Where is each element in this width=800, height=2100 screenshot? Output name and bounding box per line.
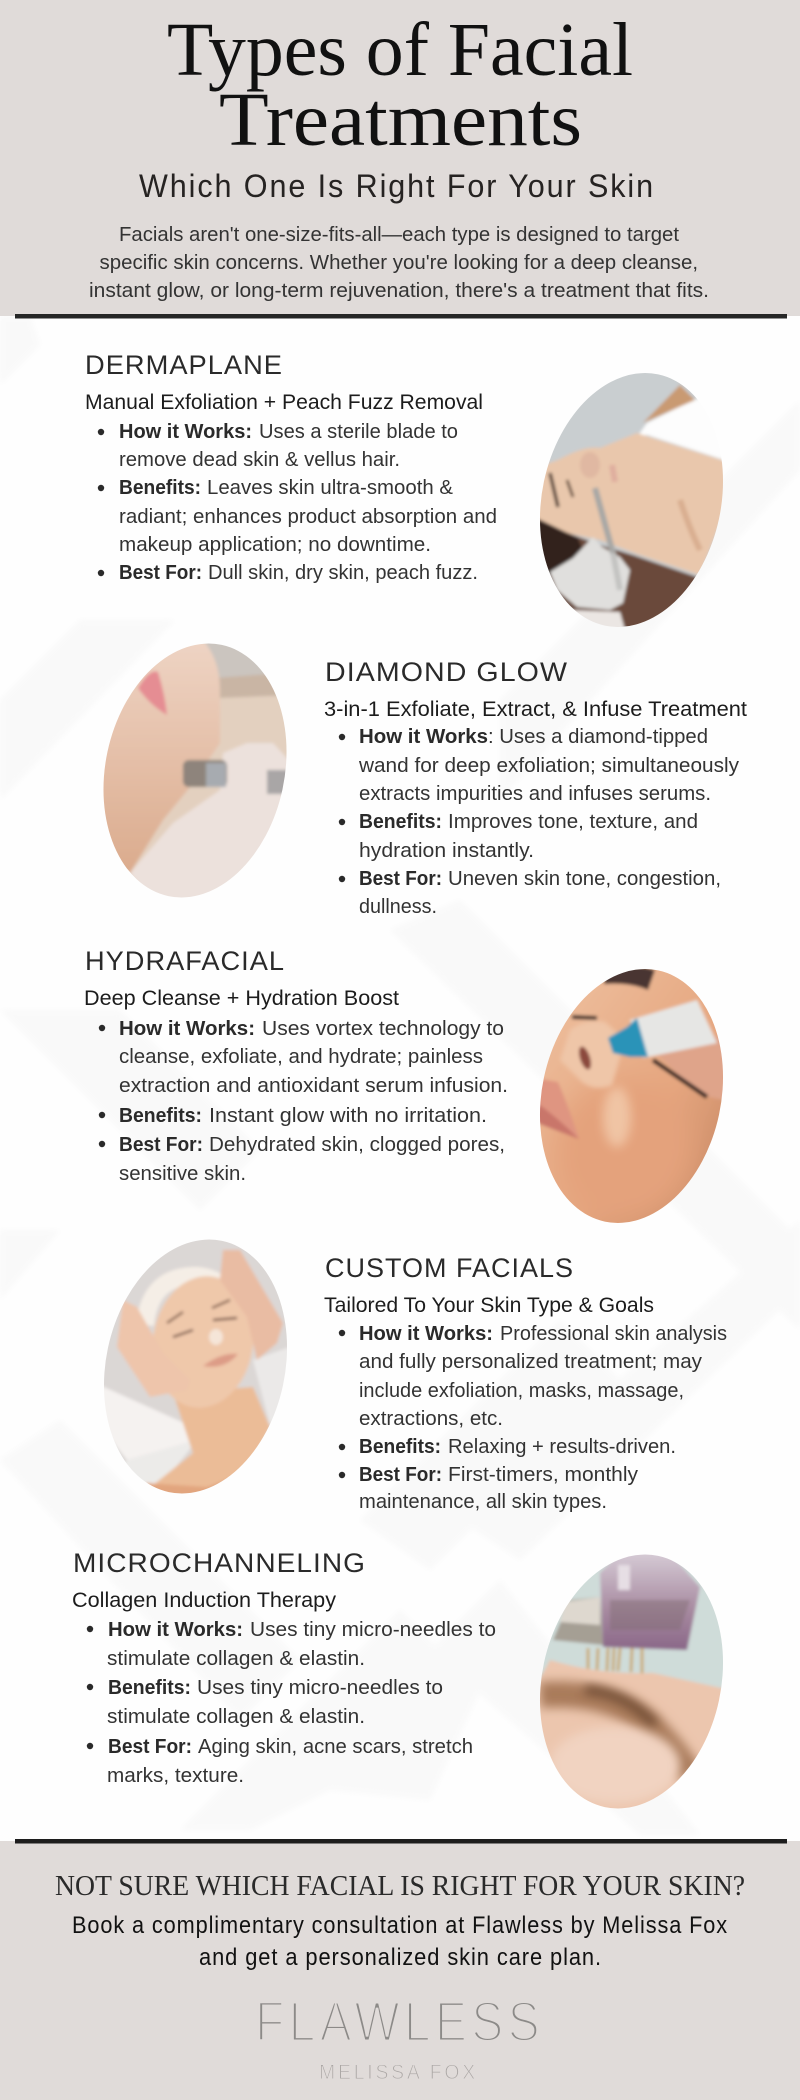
bullet list: diamond glow: Best For: — [359, 868, 442, 890]
bullet list: diamond glow: wand for deep exfoliation; simultaneously — [358, 755, 739, 777]
bullet list: custom facials: include exfoliation, masks, massage, — [359, 1380, 684, 1402]
header divider rule — [15, 314, 787, 318]
bullet list: dermaplane: Uses a sterile blade to — [259, 421, 458, 443]
bullet list: microchanneling: Uses tiny micro-needles to — [197, 1677, 443, 1699]
photo: diamond glow treatment — [104, 644, 286, 898]
bullet list: diamond glow: extracts impurities and infuses serums. — [359, 783, 711, 805]
panel: hydrafacial text — [84, 946, 508, 1185]
bullet list: dermaplane: makeup application; no downtime. — [119, 534, 431, 556]
bullet list: dermaplane: Benefits: — [119, 477, 201, 499]
photo: custom facial treatment — [104, 1240, 287, 1494]
bullet list: hydrafacial: Uses vortex technology to — [262, 1018, 504, 1040]
panel: custom facials text — [324, 1253, 727, 1513]
panel: dermaplane text — [85, 350, 497, 584]
bullet list: diamond glow: dullness. — [359, 896, 437, 918]
bullet list: hydrafacial: extraction and antioxidant serum infusion. — [119, 1075, 508, 1097]
logo: flawless melissa fox: MELISSA FOX — [319, 2061, 478, 2084]
bullet list: custom facials: First-timers, monthly — [448, 1464, 638, 1486]
heading: diamond glow: DIAMOND GLOW — [325, 657, 568, 687]
bullet list: custom facials: Best For: — [359, 1464, 442, 1486]
intro paragraph: specific skin concerns. Whether you're looking for a deep cleanse, — [100, 252, 698, 274]
intro paragraph: instant glow, or long-term rejuvenation, there's a treatment that fits. — [89, 280, 709, 302]
heading: custom facials: CUSTOM FACIALS — [325, 1253, 574, 1283]
footer panel — [0, 1841, 800, 2100]
bullet list: hydrafacial: How it Works: — [119, 1018, 255, 1040]
bullet list: dermaplane: radiant; enhances product absorption and — [119, 506, 497, 528]
bullet list: custom facials: Professional skin analysis — [500, 1323, 727, 1345]
bullet list: diamond glow: hydration instantly. — [359, 840, 534, 862]
intro paragraph — [89, 224, 709, 302]
subheading: diamond glow: 3-in-1 Exfoliate, Extract, & Infuse Treatment — [324, 698, 747, 721]
bullet list: hydrafacial — [99, 1018, 508, 1185]
bullet list: hydrafacial: Best For: — [119, 1134, 203, 1156]
bullet list: diamond glow: How it Works — [359, 726, 488, 748]
bullet list: dermaplane: Leaves skin ultra-smooth & — [207, 477, 454, 499]
photo: hydrafacial treatment — [540, 969, 723, 1223]
background chevron pattern — [0, 316, 800, 1835]
heading: hydrafacial: HYDRAFACIAL — [85, 946, 285, 976]
photo: microchanneling treatment — [540, 1554, 723, 1808]
call to action: Book a complimentary consultation at Flawless by Melissa Fox — [72, 1912, 728, 1939]
bullet list: custom facials: maintenance, all skin types. — [359, 1491, 607, 1513]
bullet list: hydrafacial: Dehydrated skin, clogged pores, — [209, 1134, 505, 1156]
subheading: hydrafacial: Deep Cleanse + Hydration Boost — [84, 987, 399, 1010]
bullet list: microchanneling: Best For: — [108, 1736, 192, 1758]
bullet list: dermaplane: remove dead skin & vellus hair. — [119, 449, 400, 471]
intro paragraph: Facials aren't one-size-fits-all—each type is designed to target — [119, 224, 679, 246]
bullet list: custom facials: How it Works: — [359, 1323, 493, 1345]
bullet list: microchanneling: stimulate collagen & elastin. — [107, 1648, 365, 1670]
bullet list: dermaplane — [98, 421, 497, 584]
logo: flawless melissa fox: FLAWLESS — [255, 1990, 544, 2054]
bullet list: diamond glow — [339, 726, 739, 918]
bullet list: diamond glow: : Uses a diamond-tipped — [488, 726, 708, 748]
heading: microchanneling: MICROCHANNELING — [73, 1548, 366, 1578]
photo: dermaplane treatment — [540, 373, 723, 627]
bullet list: microchanneling: How it Works: — [108, 1619, 243, 1641]
bullet list: microchanneling: Benefits: — [108, 1677, 191, 1699]
bullet list: diamond glow: Benefits: — [359, 811, 442, 833]
bullet list: custom facials: and fully personalized treatment; may — [359, 1351, 702, 1373]
subtitle: Which One Is Right For Your Skin — [139, 168, 655, 204]
bullet list: hydrafacial: Instant glow with no irritation. — [209, 1105, 487, 1127]
bullet list: microchanneling: stimulate collagen & elastin. — [107, 1706, 365, 1728]
bullet list: dermaplane: Dull skin, dry skin, peach fuzz. — [208, 562, 478, 584]
bullet list: dermaplane: How it Works: — [119, 421, 252, 443]
heading: dermaplane: DERMAPLANE — [85, 350, 283, 380]
bullet list: microchanneling: Aging skin, acne scars, stretch — [198, 1736, 473, 1758]
bullet list: diamond glow: Improves tone, texture, and — [448, 811, 698, 833]
subheading: dermaplane: Manual Exfoliation + Peach Fuzz Removal — [85, 391, 483, 414]
bullet list: custom facials — [339, 1323, 727, 1513]
bullet list: microchanneling: Uses tiny micro-needles to — [250, 1619, 496, 1641]
panel: diamond glow text — [324, 657, 747, 918]
panel: microchanneling text — [72, 1548, 496, 1787]
bullet list: microchanneling — [87, 1619, 496, 1787]
subheading: custom facials: Tailored To Your Skin Type & Goals — [324, 1294, 654, 1317]
logo: flawless melissa fox — [255, 1990, 544, 2084]
title: Treatments — [219, 78, 582, 162]
bullet list: custom facials: Relaxing + results-driven. — [448, 1436, 676, 1458]
call to action — [72, 1912, 728, 1971]
bullet list: microchanneling: marks, texture. — [107, 1765, 244, 1787]
subheading: microchanneling: Collagen Induction Therapy — [72, 1589, 337, 1612]
bullet list: diamond glow: Uneven skin tone, congestion, — [448, 868, 721, 890]
header panel — [0, 0, 800, 316]
bullet list: dermaplane: Best For: — [119, 562, 202, 584]
title: Types of Facial — [167, 8, 633, 92]
bullet list: hydrafacial: cleanse, exfoliate, and hydrate; painless — [119, 1046, 483, 1068]
bullet list: hydrafacial: Benefits: — [119, 1105, 202, 1127]
footer divider rule — [15, 1839, 787, 1844]
bullet list: hydrafacial: sensitive skin. — [119, 1163, 246, 1185]
call to action: and get a personalized skin care plan. — [199, 1944, 602, 1971]
bullet list: custom facials: extractions, etc. — [359, 1408, 503, 1430]
footer heading: NOT SURE WHICH FACIAL IS RIGHT FOR YOUR SKIN? — [55, 1870, 745, 1902]
bullet list: custom facials: Benefits: — [359, 1436, 441, 1458]
title — [167, 8, 633, 162]
